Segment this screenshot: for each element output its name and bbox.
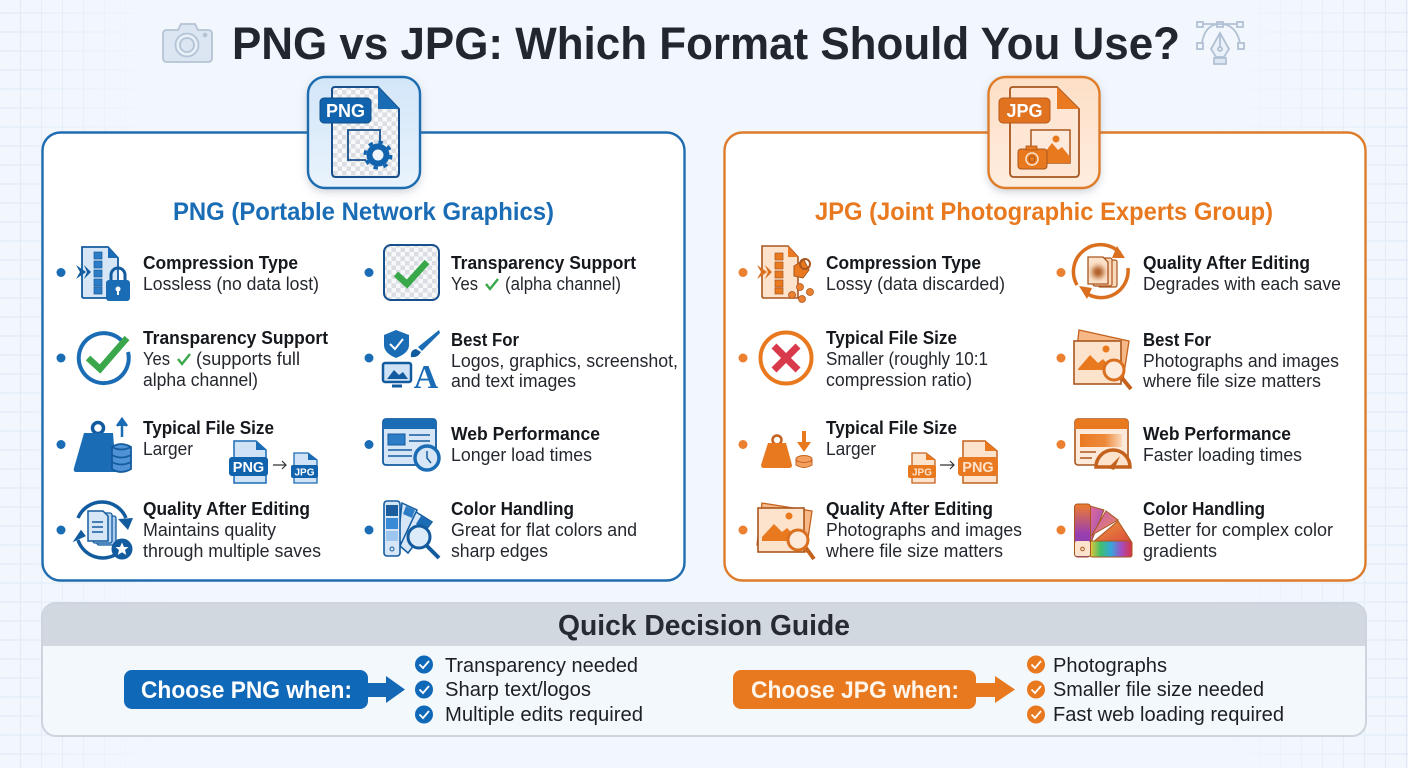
JPG to PNG mini icons (908, 441, 998, 483)
JPG item: typical file size smaller: compression ratio) (826, 370, 972, 390)
JPG to PNG mini icons: PNG (962, 460, 994, 476)
JPG item: best for: where file size matters (1142, 371, 1321, 391)
JPG item: quality after editing right (1056, 245, 1341, 299)
PNG item: quality after editing (56, 498, 321, 561)
button: choose JPG: Choose JPG when: (751, 677, 959, 704)
JPG item: color handling: gradients (1143, 541, 1217, 561)
JPG item: color handling: Color Handling (1143, 498, 1265, 519)
PNG item: transparency support right (364, 245, 636, 300)
PNG item: color handling: Great for flat colors and (451, 520, 637, 540)
icon: PNG file badge (308, 77, 420, 188)
button: choose JPG (733, 670, 1015, 709)
PNG checklist: Multiple edits required (445, 704, 643, 726)
PNG item: transparency support left (56, 327, 328, 390)
PNG heading: PNG (Portable Network Graphics) (173, 198, 554, 226)
PNG item: typical file size (56, 417, 318, 483)
JPG item: quality after editing right: Degrades with each save (1143, 274, 1341, 294)
panel: PNG (42, 132, 684, 580)
PNG item: compression type: Lossless (no data lost) (143, 274, 319, 294)
PNG item: transparency support left: Yes (143, 349, 170, 369)
PNG item: quality after editing: through multiple saves (143, 541, 321, 561)
PNG item: compression type (56, 247, 319, 301)
JPG item: compression type: Compression Type (826, 252, 981, 273)
PNG item: quality after editing: Maintains quality (143, 520, 276, 540)
PNG item: transparency support right: Transparency Support (451, 252, 636, 273)
JPG item: quality after editing left (738, 498, 1022, 561)
PNG item: transparency support right: Yes (451, 274, 478, 294)
JPG item: typical file size smaller: Smaller (roughly 10:1 (826, 349, 988, 369)
PNG item: quality after editing: Quality After Editing (143, 498, 310, 519)
PNG item: typical file size: Larger (143, 439, 193, 459)
PNG item: color handling (364, 498, 637, 561)
PNG to JPG mini icons: PNG (233, 460, 264, 476)
PNG checklist: Transparency needed (445, 655, 638, 677)
PNG to JPG mini icons: JPG (294, 468, 315, 478)
JPG item: quality after editing left: Quality After Editing (826, 498, 993, 519)
panel: quick decision guide (42, 603, 1366, 736)
JPG item: typical file size smaller: Typical File Size (826, 327, 957, 348)
guide heading: Quick Decision Guide (558, 610, 850, 642)
JPG item: best for: Photographs and images (1143, 351, 1339, 371)
JPG item: typical file size larger (738, 417, 998, 483)
JPG item: color handling (1056, 498, 1333, 561)
PNG item: transparency support left: (supports full (196, 349, 300, 369)
JPG item: compression type (738, 246, 1005, 302)
PNG to JPG mini icons (229, 441, 318, 483)
icon: JPG file badge: JPG (1006, 101, 1043, 121)
JPG item: color handling: Better for complex color (1143, 520, 1333, 540)
PNG checklist: Sharp text/logos (445, 679, 591, 701)
PNG item: web performance (364, 419, 600, 470)
PNG item: best for: Logos, graphics, screenshot, (451, 351, 678, 371)
PNG item: best for (364, 329, 678, 396)
JPG item: typical file size smaller (738, 327, 988, 390)
PNG item: compression type: Compression Type (143, 252, 298, 273)
button: choose PNG: Choose PNG when: (141, 677, 352, 704)
JPG item: web performance: Faster loading times (1143, 445, 1302, 465)
JPG item: quality after editing right: Quality After Editing (1143, 252, 1310, 273)
panel: JPG (724, 132, 1366, 580)
PNG checklist (415, 655, 643, 726)
JPG item: best for (1056, 329, 1339, 391)
JPG item: compression type: Lossy (data discarded) (826, 274, 1005, 294)
title: PNG vs JPG: Which Format Should You Use? (232, 18, 1180, 69)
icon: pen tool (1197, 22, 1244, 64)
PNG item: transparency support left: alpha channel) (143, 370, 258, 390)
JPG item: typical file size larger: Typical File Size (826, 417, 957, 438)
PNG item: web performance: Web Performance (451, 423, 600, 444)
JPG checklist: Photographs (1053, 655, 1167, 677)
PNG item: best for: A (414, 359, 439, 396)
PNG item: color handling: Color Handling (451, 498, 574, 519)
JPG checklist (1027, 655, 1284, 726)
JPG item: best for: Best For (1143, 329, 1211, 350)
PNG item: color handling: sharp edges (451, 541, 548, 561)
JPG to PNG mini icons: JPG (912, 468, 932, 478)
button: choose PNG (124, 670, 405, 709)
icon: PNG file badge: PNG (326, 101, 365, 121)
PNG item: transparency support left: Transparency Support (143, 327, 328, 348)
PNG item: web performance: Longer load times (451, 445, 592, 465)
JPG heading: JPG (Joint Photographic Experts Group) (815, 198, 1273, 226)
icon: camera (163, 24, 212, 62)
JPG checklist: Smaller file size needed (1053, 679, 1264, 701)
JPG item: quality after editing left: Photographs and images (826, 520, 1022, 540)
PNG item: best for: Best For (451, 329, 519, 350)
JPG item: web performance: Web Performance (1143, 423, 1291, 444)
JPG checklist: Fast web loading required (1053, 704, 1284, 726)
PNG item: typical file size: Typical File Size (143, 417, 274, 438)
PNG item: best for: and text images (451, 371, 576, 391)
JPG item: quality after editing left: where file size matters (825, 541, 1003, 561)
JPG item: typical file size larger: Larger (826, 439, 876, 459)
icon: JPG file badge (988, 77, 1100, 188)
JPG item: web performance (1056, 419, 1302, 470)
PNG item: transparency support right: (alpha channel) (505, 274, 621, 294)
